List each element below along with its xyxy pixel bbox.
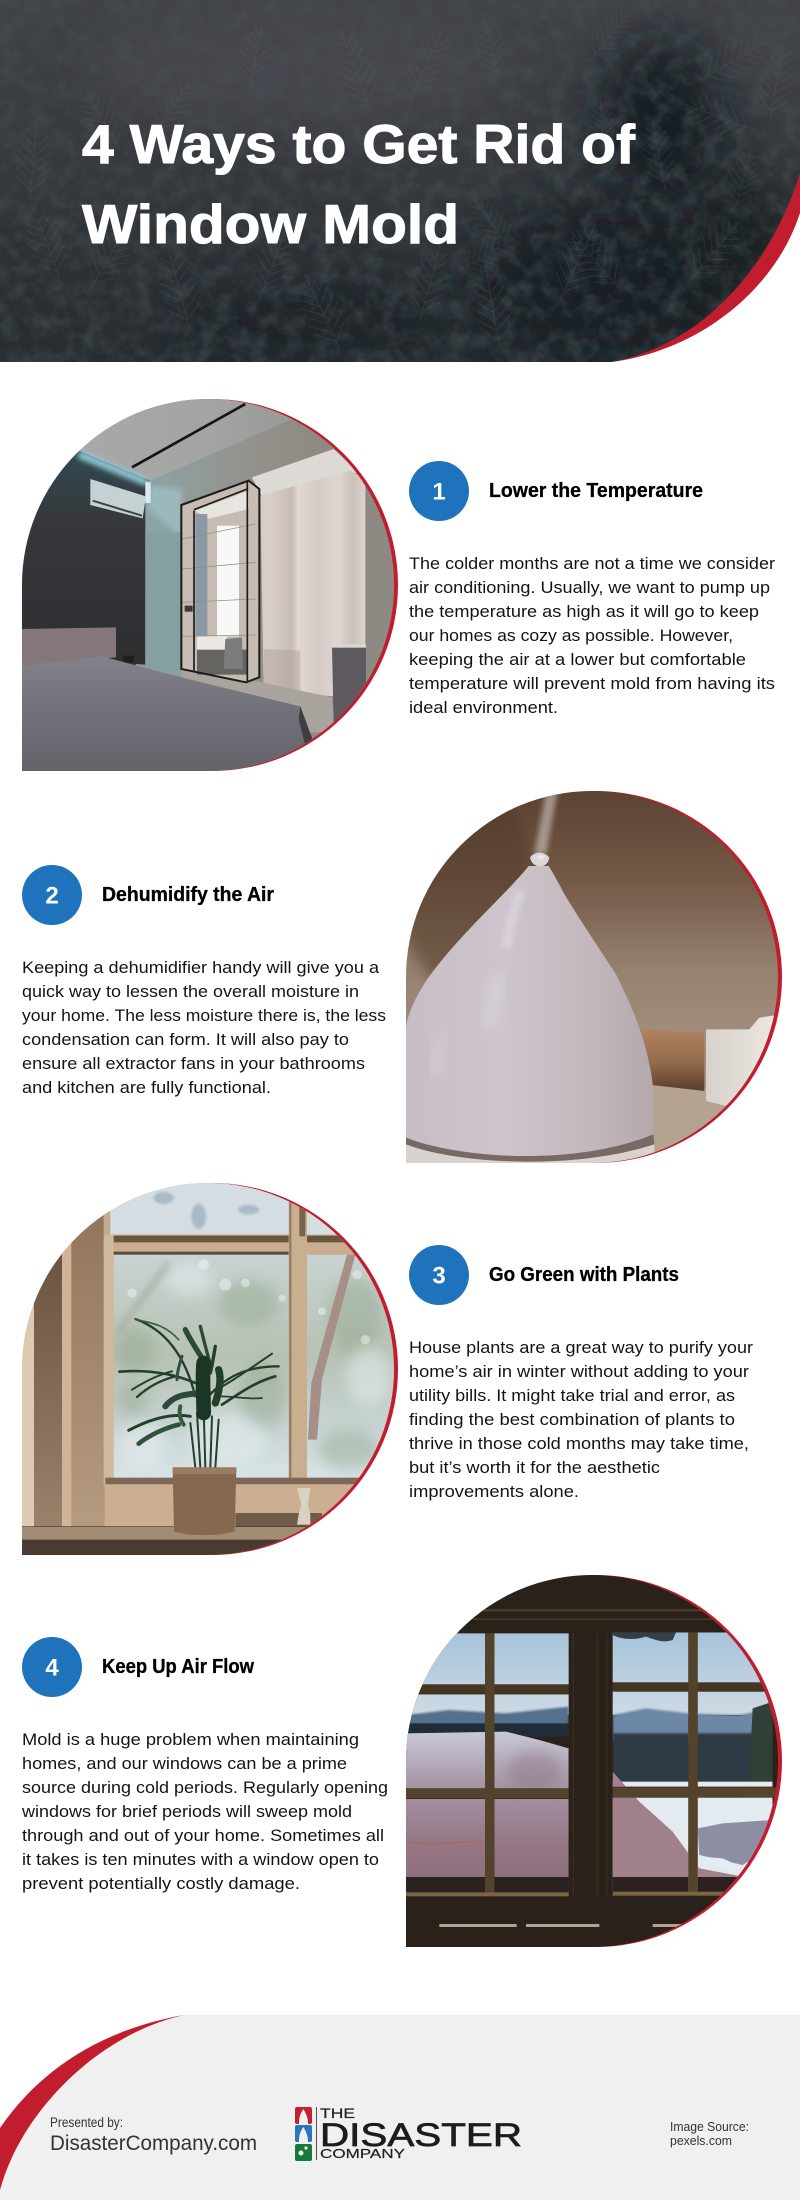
icon: flame red	[295, 2107, 312, 2124]
step number 4	[22, 1637, 82, 1697]
step number 3: 3	[432, 1262, 446, 1290]
logo: The Disaster Company	[295, 2105, 522, 2161]
window panes	[109, 1183, 398, 1478]
steam	[534, 791, 558, 854]
body text: homes, and our windows can be a prime	[22, 1754, 347, 1773]
panel: step 2 dehumidify the air	[22, 774, 782, 1163]
panel: step 3 go green with plants	[22, 1183, 753, 1555]
image source	[670, 2119, 749, 2148]
heading: Dehumidify the Air	[102, 884, 274, 906]
body text: improvements alone.	[409, 1482, 579, 1501]
body text: House plants are a great way to purify your	[409, 1338, 753, 1357]
cone highlights	[506, 891, 521, 948]
wooden arm	[639, 1029, 704, 1091]
body text: Keeping a dehumidifier handy will give you a	[22, 958, 380, 977]
body text: but it’s worth it for the aesthetic	[409, 1458, 661, 1477]
mirror frame	[181, 481, 259, 682]
right wall	[366, 486, 394, 683]
presented by: DisasterCompany.com	[50, 2132, 257, 2155]
brass catch on sill	[297, 1488, 310, 1525]
body text: ensure all extractor fans in your bathrooms	[22, 1054, 365, 1073]
body text	[409, 554, 775, 717]
body text: condensation can form. It will also pay to	[22, 1030, 349, 1049]
window sill	[22, 1526, 308, 1555]
diffuser body	[406, 866, 654, 1156]
base ring	[406, 1134, 654, 1162]
body text: prevent potentially costly damage.	[22, 1874, 300, 1893]
photo: bedroom with air conditioner	[22, 399, 399, 772]
presented by: Presented by:	[50, 2115, 123, 2130]
step number 4: 4	[45, 1654, 59, 1682]
title: 4 Ways to Get Rid of	[82, 113, 636, 175]
body text: air conditioning. Usually, we want to pump up	[409, 578, 770, 597]
image source: Image Source:	[670, 2119, 749, 2134]
sash bars	[406, 1632, 776, 1896]
red photo rim	[410, 791, 782, 1163]
red photo rim	[26, 1183, 398, 1555]
body text: finding the best combination of plants to	[409, 1410, 735, 1429]
bed	[22, 656, 314, 771]
body text	[22, 958, 386, 1097]
body text: home’s air in winter without adding to your	[409, 1362, 749, 1381]
logo: The Disaster Company: DISASTER	[320, 2117, 522, 2153]
curtain	[260, 471, 365, 699]
body text	[409, 1338, 753, 1501]
white sleeve	[706, 1016, 774, 1106]
white corner curve	[612, 213, 800, 362]
body text	[21, 1730, 388, 1893]
footer panel	[0, 2015, 800, 2200]
red curve accent	[0, 2015, 184, 2190]
body text: source during cold periods. Regularly opening	[22, 1778, 388, 1797]
icon: water blue	[295, 2125, 312, 2142]
photo: potted plant on window sill	[22, 1183, 398, 1555]
heading: Lower the Temperature	[489, 480, 703, 502]
table surface	[640, 1085, 740, 1157]
pot	[173, 1467, 236, 1535]
chair	[332, 648, 366, 722]
body text: our homes as cozy as possible. However,	[409, 626, 733, 645]
body text: temperature will prevent mold from having its	[409, 674, 775, 693]
heading: Keep Up Air Flow	[102, 1656, 254, 1678]
frost photo background	[0, 0, 800, 362]
body text: through and out of your home. Sometimes all	[22, 1826, 384, 1845]
body text: windows for brief periods will sweep mold	[21, 1802, 352, 1821]
body text: it takes is ten minutes with a window open to	[22, 1850, 379, 1869]
white band above curtain	[252, 449, 359, 496]
body text: and kitchen are fully functional.	[22, 1078, 271, 1097]
step number 1: 1	[432, 478, 446, 506]
panel: step 4 keep up air flow	[21, 1575, 782, 1947]
heading: Go Green with Plants	[489, 1264, 679, 1286]
body text: ideal environment.	[409, 698, 558, 717]
red curve accent	[612, 173, 800, 362]
light strips on sill	[439, 1924, 681, 1927]
red photo rim	[26, 399, 398, 771]
image source: pexels.com	[670, 2133, 732, 2148]
photo: white diffuser	[399, 774, 782, 1163]
body text: thrive in those cold months may take time,	[409, 1434, 749, 1453]
title	[82, 113, 636, 255]
floor	[181, 671, 335, 732]
body text: the temperature as high as it will go to keep	[409, 602, 759, 621]
plant leaves	[119, 1319, 279, 1467]
icon: mold green	[295, 2144, 312, 2161]
logo: The Disaster Company: COMPANY	[320, 2146, 405, 2161]
body text: Mold is a huge problem when maintaining	[22, 1730, 359, 1749]
body text: your home. The less moisture there is, the less	[22, 1006, 386, 1025]
title: Window Mold	[82, 193, 459, 255]
body text: utility bills. It might take trial and error, as	[409, 1386, 735, 1405]
view through panes	[406, 1632, 782, 1895]
header banner	[0, 0, 800, 362]
presented by	[50, 2115, 257, 2155]
step number 1	[409, 461, 469, 521]
body text: quick way to lessen the overall moisture in	[22, 982, 359, 1001]
photo: snowy view through a wooden window	[406, 1575, 782, 1947]
step number 2: 2	[45, 882, 59, 910]
window frame bars	[104, 1201, 359, 1527]
footer background	[0, 2015, 800, 2200]
logo: The Disaster Company: THE	[320, 2105, 355, 2121]
body text: keeping the air at a lower but comfortable	[409, 650, 746, 669]
white corner	[0, 2015, 184, 2128]
air conditioner	[90, 479, 146, 518]
step number 2	[22, 865, 82, 925]
step number 3	[409, 1245, 469, 1305]
headboard	[22, 627, 116, 666]
body text: The colder months are not a time we consider	[409, 554, 775, 573]
red photo rim	[410, 1575, 782, 1947]
panel: step 1 lower the temperature	[22, 399, 775, 772]
central mullion	[573, 1633, 607, 1897]
